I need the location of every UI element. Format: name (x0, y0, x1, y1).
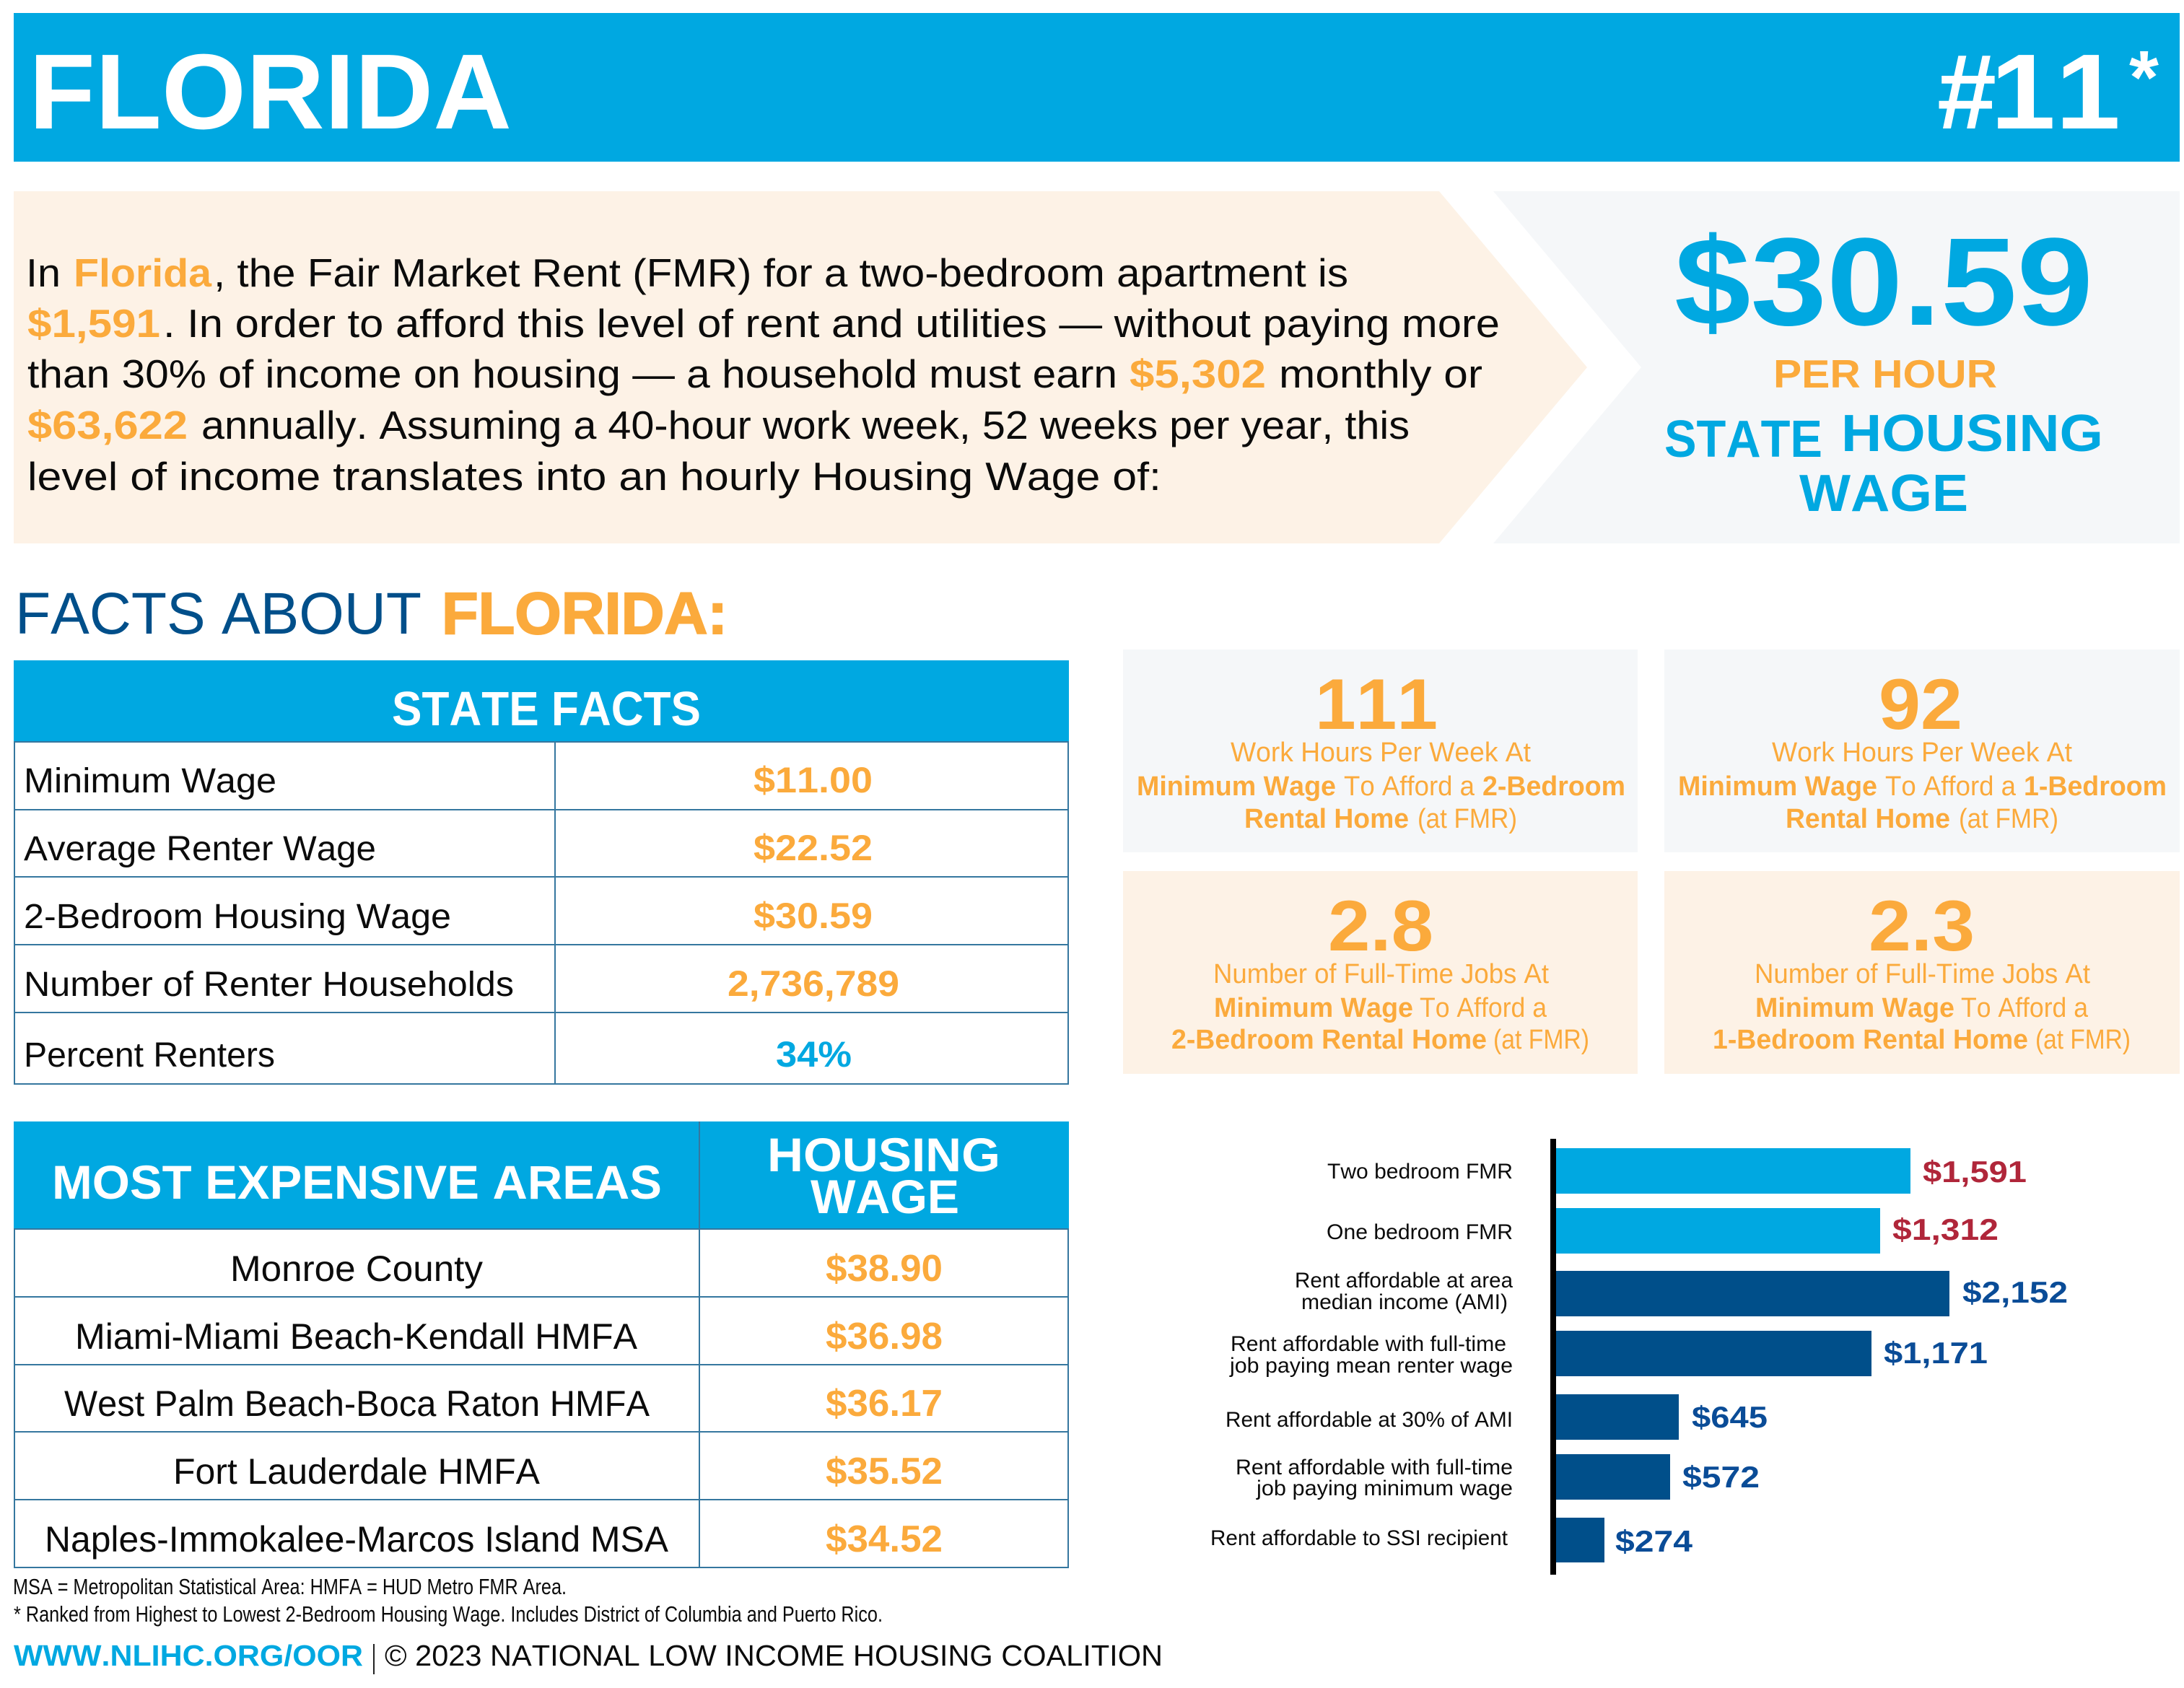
row: west palm beach (64, 1383, 943, 1425)
stat card: work hours 1-bedroom: Work Hours Per Week At (1772, 738, 2072, 768)
stat card: full-time jobs 1-bedroom: Number of Full-Time Jobs At (1755, 959, 2090, 989)
bar: rent affordable at mean renter wage: job paying mean renter wage (1229, 1354, 1513, 1378)
row: fort lauderdale: $35.52 (826, 1451, 943, 1492)
bar: rent affordable at minimum wage: Rent affordable with full-time (1236, 1456, 1513, 1479)
explanation text: $1,591 (27, 301, 160, 346)
bar: rent affordable to SSI recipient: Rent affordable to SSI recipient (1210, 1526, 1508, 1550)
explanation text: , the Fair Market Rent (FMR) for a two-bedroom apartment is (214, 250, 1348, 295)
row: fort lauderdale: Fort Lauderdale HMFA (173, 1451, 541, 1492)
stat card: work hours 2-bedroom: To Afford a (1344, 771, 1475, 802)
bar: rent affordable at 30% of AMI: $645 (1692, 1400, 1768, 1434)
stat card: full-time jobs 2-bedroom: Number of Full-Time Jobs At (1213, 959, 1549, 989)
footer: source and copyright: © 2023 NATIONAL LOW INCOME HOUSING COALITION (385, 1639, 1163, 1672)
stat card: full-time jobs 2-bedroom: To Afford a (1420, 993, 1547, 1023)
row: minimum wage: Minimum Wage (24, 762, 276, 800)
stat card: work hours 2-bedroom: Minimum Wage (1137, 771, 1336, 802)
row: number of renter households: Number of Renter Households (24, 966, 514, 1004)
row: monroe county (230, 1248, 943, 1290)
state rank: 1 (1991, 32, 2056, 152)
stat card: work hours 1-bedroom: 92 (1879, 664, 1962, 744)
explanation text: level of income translates into an hourly Housing Wage of: (27, 454, 1161, 499)
explanation text: In (26, 250, 61, 295)
row: number of renter households (24, 963, 899, 1004)
bar: rent affordable at mean renter wage (1229, 1331, 1988, 1378)
explanation text (26, 250, 1500, 499)
footnotes (13, 1574, 883, 1627)
per hour label: PER HOUR (1773, 351, 1997, 396)
bar: rent affordable at mean renter wage: Rent affordable with full-time (1231, 1332, 1506, 1356)
row: miami: Miami-Miami Beach-Kendall HMFA (75, 1316, 638, 1357)
stat card: full-time jobs 1-bedroom (1664, 871, 2180, 1074)
bar: two bedroom FMR: Two bedroom FMR (1327, 1160, 1513, 1184)
explanation text: annually. Assuming a 40-hour work week, 52 weeks per year, this (201, 403, 1410, 447)
stat card: full-time jobs 2-bedroom (1123, 871, 1638, 1074)
row: average renter wage (24, 828, 873, 868)
state rank (1937, 32, 2159, 152)
hourly wage figure: $30.59 (1674, 211, 2093, 351)
row: naples (45, 1518, 943, 1560)
table heading: housing wage: WAGE (811, 1170, 959, 1223)
bar: two bedroom FMR: $1,591 (1923, 1155, 2027, 1189)
row: miami: $36.98 (826, 1316, 943, 1357)
bar: rent affordable at AMI: median income (AMI) (1301, 1290, 1508, 1314)
table heading: STATE FACTS (392, 682, 701, 736)
row: percent renters: 34% (776, 1034, 852, 1075)
table heading: areas: MOST EXPENSIVE AREAS (52, 1155, 662, 1209)
bar chart: rent comparison (1210, 1139, 2068, 1575)
row: number of renter households: 2,736,789 (728, 963, 899, 1004)
state housing wage label: STATE (1664, 411, 1822, 468)
bar: one bedroom FMR (1327, 1208, 1999, 1254)
stat card: work hours 1-bedroom: Rental Home (1786, 804, 1950, 834)
row: miami (75, 1316, 943, 1357)
row: west palm beach: $36.17 (826, 1383, 943, 1425)
state housing wage label: WAGE (1799, 465, 1968, 522)
row: minimum wage: $11.00 (754, 760, 873, 800)
stat card: work hours 1-bedroom: (at FMR) (1959, 804, 2058, 834)
panel: housing wage explanation arrow (14, 191, 1587, 543)
stat card: full-time jobs 1-bedroom: To Afford a (1961, 993, 2089, 1023)
title: state name: FLORIDA (29, 32, 512, 152)
row: 2-bedroom housing wage (24, 896, 873, 936)
table heading: housing wage (767, 1128, 1000, 1223)
row: percent renters (24, 1034, 852, 1075)
bar: rent affordable at AMI: $2,152 (1962, 1275, 2068, 1309)
panel: state facts table (14, 660, 1069, 1084)
footnotes: * Ranked from Highest to Lowest 2-Bedroom Housing Wage. Includes District of Columbia and Puerto Rico. (14, 1601, 883, 1627)
explanation text: $63,622 (27, 403, 188, 447)
stat card: work hours 2-bedroom: 2-Bedroom (1482, 771, 1625, 802)
bar: rent affordable to SSI recipient (1210, 1518, 1693, 1562)
stat card: full-time jobs 1-bedroom: (at FMR) (2035, 1025, 2131, 1055)
heading: facts about florida: FLORIDA: (442, 581, 728, 647)
bar: rent affordable at AMI: Rent affordable at area (1295, 1269, 1513, 1293)
stat card: full-time jobs 2-bedroom: (at FMR) (1493, 1025, 1589, 1055)
stat card: work hours 2-bedroom: Work Hours Per Week At (1231, 738, 1531, 768)
explanation text: $5,302 (1130, 351, 1266, 396)
stat card: work hours 1-bedroom: 1-Bedroom (2024, 771, 2167, 802)
table heading: housing wage: HOUSING (767, 1128, 1000, 1181)
bar: rent affordable to SSI recipient: $274 (1615, 1524, 1693, 1558)
row: minimum wage (24, 760, 873, 800)
bar: two bedroom FMR (1327, 1148, 2027, 1194)
state rank: 1 (2056, 32, 2120, 152)
stat card: work hours 1-bedroom: Minimum Wage (1678, 771, 1877, 802)
stat card: work hours 2-bedroom: Rental Home (1244, 804, 1409, 834)
stat card: work hours 2-bedroom (1123, 650, 1638, 852)
stat card: full-time jobs 2-bedroom: 2-Bedroom Rental Home (1171, 1025, 1487, 1055)
explanation text: Florida (74, 250, 211, 295)
footer: source and copyright (14, 1639, 1163, 1674)
footnotes: MSA = Metropolitan Statistical Area: HMFA = HUD Metro FMR Area. (13, 1574, 567, 1599)
explanation text: monthly or (1279, 351, 1482, 396)
state housing wage label: HOUSING (1841, 405, 2103, 463)
row: average renter wage: Average Renter Wage (24, 830, 376, 868)
row: naples: Naples-Immokalee-Marcos Island MSA (45, 1519, 669, 1560)
stat card: full-time jobs 2-bedroom: Minimum Wage (1214, 993, 1413, 1023)
state rank: * (2129, 35, 2159, 120)
state housing wage label (1664, 405, 2103, 522)
bar: rent affordable at AMI (1295, 1269, 2068, 1316)
stat card: full-time jobs 1-bedroom: 2.3 (1869, 885, 1975, 966)
row: monroe county: Monroe County (230, 1248, 483, 1289)
stat card: full-time jobs 2-bedroom: 2.8 (1328, 885, 1433, 966)
explanation text: than 30% of income on housing — a household must earn (27, 351, 1117, 396)
bar: rent affordable at 30% of AMI (1226, 1394, 1768, 1440)
row: 2-bedroom housing wage: $30.59 (754, 896, 873, 936)
row: percent renters: Percent Renters (24, 1036, 275, 1075)
row: fort lauderdale (173, 1451, 943, 1492)
stat card: work hours 2-bedroom: 111 (1315, 664, 1438, 744)
row: west palm beach: West Palm Beach-Boca Raton HMFA (64, 1383, 650, 1424)
bar: one bedroom FMR: One bedroom FMR (1327, 1220, 1513, 1244)
bar: rent affordable at mean renter wage: $1,171 (1884, 1336, 1988, 1370)
state rank: # (1937, 32, 1996, 152)
row: naples: $34.52 (826, 1518, 943, 1560)
row: monroe county: $38.90 (826, 1248, 943, 1290)
bar: rent affordable at minimum wage: job paying minimum wage (1256, 1477, 1513, 1500)
heading: facts about florida: FACTS ABOUT (15, 581, 421, 647)
stat card: full-time jobs 1-bedroom: Minimum Wage (1755, 993, 1954, 1023)
row: average renter wage: $22.52 (754, 828, 873, 868)
panel: most expensive areas table (14, 1121, 1069, 1567)
explanation text: . In order to afford this level of rent and utilities — without paying more (163, 301, 1500, 346)
stat card: work hours 1-bedroom (1664, 650, 2180, 852)
bar: one bedroom FMR: $1,312 (1892, 1212, 1999, 1246)
stat card: work hours 2-bedroom: (at FMR) (1418, 804, 1517, 834)
bar: rent affordable at 30% of AMI: Rent affordable at 30% of AMI (1226, 1408, 1513, 1432)
bar: rent affordable at minimum wage: $572 (1682, 1460, 1760, 1494)
bar: rent affordable at minimum wage (1236, 1454, 1760, 1500)
heading: facts about florida (15, 581, 728, 647)
footer: source and copyright: WWW.NLIHC.ORG/OOR (14, 1639, 363, 1672)
header banner (14, 13, 2180, 162)
row: 2-bedroom housing wage: 2-Bedroom Housing Wage (24, 898, 451, 936)
stat card: work hours 1-bedroom: To Afford a (1885, 771, 2017, 802)
panel: state housing wage (1493, 191, 2180, 543)
stat card: full-time jobs 1-bedroom: 1-Bedroom Rental Home (1713, 1025, 2028, 1055)
